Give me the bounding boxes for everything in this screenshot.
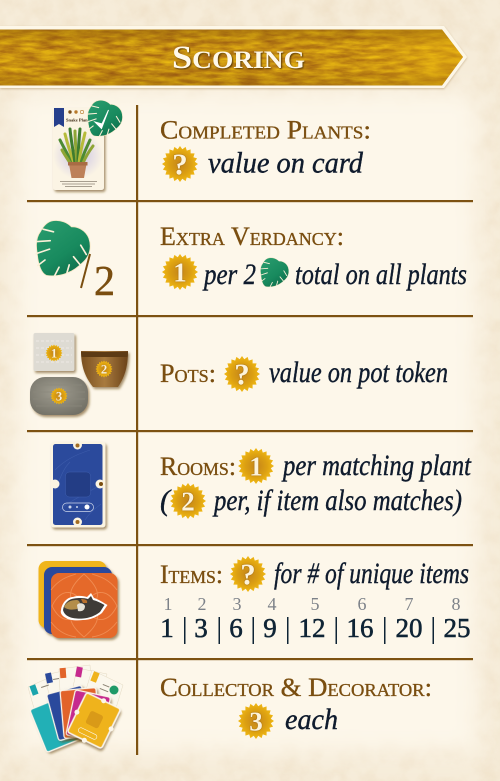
badge: question: ?	[234, 356, 250, 392]
badge: three: 3	[249, 706, 263, 736]
row: extra verdancy	[36, 220, 467, 305]
scale: points: 12	[298, 613, 326, 643]
heading: items: Items:	[160, 560, 223, 589]
icon: small leaf	[260, 258, 289, 287]
icon: three pot tokens	[30, 333, 128, 415]
icon: three pot tokens: 3	[56, 389, 62, 403]
heading: collector and decorator: Collector & Decorator:	[160, 673, 432, 702]
icon: plant card with completed leaf	[53, 100, 123, 190]
scale: item counts: 4	[268, 594, 276, 614]
heading: completed plants: Completed Plants:	[160, 116, 371, 144]
icon: fan of cards	[28, 665, 124, 752]
heading: extra verdancy: Extra Verdancy:	[160, 222, 344, 251]
icon: blue room card	[50, 440, 106, 528]
scale: points: 9	[263, 613, 277, 643]
scale: item counts: 7	[404, 594, 414, 614]
scale: item counts	[164, 594, 460, 614]
text: per 2: per 2	[202, 258, 256, 291]
badge: three	[238, 703, 274, 739]
scale: points: 16	[346, 613, 374, 643]
badge: two: 2	[181, 486, 195, 516]
badge: one	[238, 448, 274, 484]
badge: question	[230, 556, 266, 592]
row: collector and decorator	[28, 665, 432, 752]
title: Scoring	[172, 36, 305, 76]
banner: scoring	[0, 26, 467, 88]
table grid lines	[27, 105, 473, 755]
scale: points: 20	[396, 613, 422, 643]
row: pots	[30, 333, 448, 415]
text: each: each	[285, 703, 338, 736]
row: items	[38, 556, 470, 644]
scale: item counts: 8	[452, 594, 460, 614]
scale: item counts: 3	[232, 594, 242, 614]
scale: item counts: 2	[198, 594, 206, 614]
text: value on card: value on card	[208, 146, 364, 180]
badge: question: ?	[172, 146, 188, 182]
icon: leaf over two: 2	[94, 259, 115, 305]
icon: leaf over two	[36, 220, 115, 305]
scale: points	[160, 613, 470, 644]
badge: question	[162, 146, 198, 182]
scale: points: 6	[229, 613, 243, 643]
scale: item counts: 5	[310, 594, 320, 614]
heading: rooms: Rooms:	[160, 452, 236, 481]
badge: two	[170, 483, 206, 519]
badge: question	[224, 356, 260, 392]
row: completed plants	[53, 100, 371, 190]
row: rooms	[50, 440, 472, 528]
badge: one	[162, 254, 198, 290]
badge: one: 1	[249, 452, 263, 482]
icon: plant card with completed leaf: Snake Plant	[66, 118, 90, 122]
text: value on pot token: value on pot token	[269, 356, 448, 389]
badge: one: 1	[173, 258, 187, 288]
badge: question: ?	[240, 556, 256, 592]
icon: three pot tokens: 2	[101, 362, 107, 376]
heading: pots: Pots:	[160, 359, 216, 388]
scale: points: 1	[160, 613, 174, 643]
scale: points: 3	[194, 613, 208, 643]
icon: three pot tokens: 1	[51, 346, 57, 360]
icon: item tiles with cat	[38, 561, 118, 638]
scale: item counts: 1	[164, 594, 172, 614]
text: open parenthesis: (	[160, 484, 172, 517]
scale: item counts: 6	[358, 594, 366, 614]
scale: points: 25	[444, 613, 470, 643]
